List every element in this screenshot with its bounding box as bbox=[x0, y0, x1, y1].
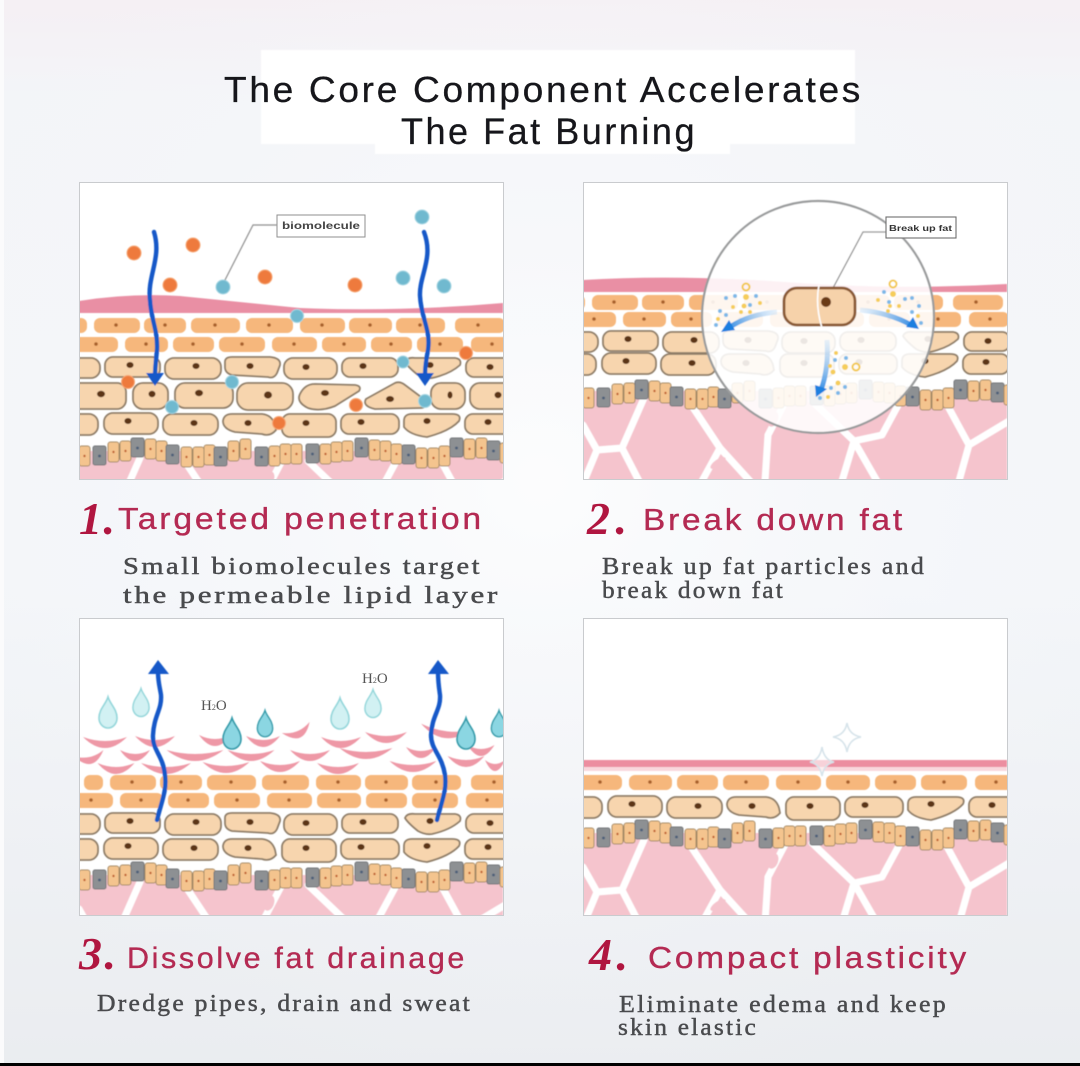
step 4 description: Eliminate edema and keep bbox=[619, 992, 948, 1018]
magnifier circle bbox=[702, 201, 934, 433]
biomolecule leader line bbox=[225, 225, 277, 280]
step 4 heading: Compact plasticity bbox=[648, 940, 969, 975]
step 1 description: Small biomolecules target bbox=[123, 554, 482, 580]
step 2 heading: 2. bbox=[586, 493, 627, 544]
panel: compact plasticity illustration bbox=[584, 619, 1007, 915]
title bbox=[224, 69, 863, 152]
water drops bbox=[99, 689, 507, 749]
arrow down bbox=[815, 340, 827, 397]
step 2 heading bbox=[586, 493, 905, 544]
step 1 description bbox=[123, 554, 500, 609]
panel: targeted penetration illustration bbox=[80, 183, 503, 479]
break up fat label: Break up fat bbox=[889, 224, 952, 233]
H2O label right: H2O bbox=[362, 671, 388, 687]
biomolecule label bbox=[277, 215, 365, 237]
step 1 description: the permeable lipid layer bbox=[123, 583, 500, 609]
step 2 description: Break up fat particles and bbox=[602, 554, 926, 580]
fat particles bbox=[716, 280, 920, 399]
leader line bbox=[833, 232, 886, 288]
step 2 description: break down fat bbox=[602, 578, 785, 604]
sparkles bbox=[810, 723, 861, 776]
H2O label left: H2O bbox=[201, 698, 227, 714]
skin layers bbox=[558, 278, 1015, 491]
step 4 description bbox=[618, 992, 948, 1041]
step 1 heading: 1. bbox=[79, 493, 115, 544]
panel: dissolve fat drainage illustration bbox=[80, 619, 503, 915]
step 2 heading: Break down fat bbox=[643, 502, 905, 537]
title: The Fat Burning bbox=[401, 111, 697, 152]
step 4 heading bbox=[588, 929, 969, 980]
step 1 heading bbox=[79, 493, 484, 544]
pink scales of stratum corneum bbox=[74, 722, 505, 774]
fat cell splitting bbox=[784, 285, 855, 328]
left blue arrow bbox=[146, 232, 164, 386]
break up fat label bbox=[886, 217, 956, 238]
step 4 description: skin elastic bbox=[618, 1015, 758, 1041]
step 3 heading: Dissolve fat drainage bbox=[127, 942, 467, 975]
step 1 heading: Targeted penetration bbox=[118, 501, 484, 536]
skin layers bbox=[80, 774, 503, 915]
title: The Core Component Accelerates bbox=[224, 69, 863, 110]
arrow left bbox=[721, 312, 777, 332]
skin layers bbox=[80, 294, 503, 479]
biomolecule dots orange bbox=[122, 238, 472, 430]
left blue up arrow bbox=[148, 660, 169, 820]
step 4 heading: 4. bbox=[588, 929, 628, 980]
right blue arrow bbox=[416, 232, 434, 386]
step 3 description: Dredge pipes, drain and sweat bbox=[97, 991, 472, 1017]
step 2 description bbox=[602, 554, 926, 604]
right blue up arrow bbox=[428, 660, 449, 820]
biomolecule label: biomolecule bbox=[282, 220, 360, 232]
arrow right bbox=[860, 310, 919, 329]
step 3 heading: 3. bbox=[78, 928, 116, 979]
panel: break down fat illustration bbox=[584, 183, 1007, 479]
skin layers bbox=[584, 759, 1007, 915]
biomolecule dots blue bbox=[166, 210, 451, 414]
step 3 heading bbox=[78, 928, 467, 979]
